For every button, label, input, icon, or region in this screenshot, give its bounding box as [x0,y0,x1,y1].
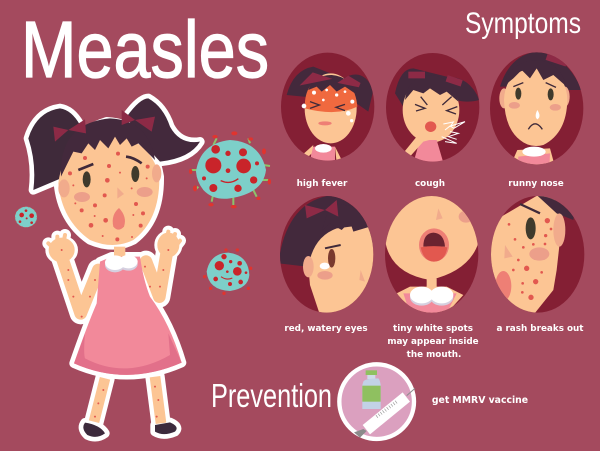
collar [105,258,125,272]
virus: large [189,131,271,208]
label: red, watery eyes: red, watery eyes [284,324,368,334]
eyes [83,171,91,187]
label: get MMRV vaccine: get MMRV vaccine [432,395,528,406]
label: cough: cough [415,179,445,189]
label: tiny white spots: may appear inside [387,337,479,347]
limb spots [61,249,169,418]
virus: small [15,207,37,227]
vaccine icon [339,364,415,439]
eyebrows [78,157,142,170]
vial [362,370,381,409]
fringe [61,118,155,177]
symptom: runny nose [490,52,583,170]
symptom: white spots in mouth [385,195,480,313]
heading: prevention: Prevention [211,377,332,414]
head [58,135,159,245]
symptom: high fever [281,53,374,170]
label: runny nose: runny nose [508,179,564,189]
shoes [83,422,177,437]
mouth [113,208,125,230]
symptom: red, watery eyes [278,195,377,315]
dress [74,257,182,375]
bows [53,110,155,142]
label: tiny white spots [387,324,479,360]
neck [114,247,125,258]
girl illustration [28,98,200,437]
label: a rash breaks out: a rash breaks out [496,324,584,334]
hair ponytails [28,108,80,190]
spots [68,152,150,241]
arms [48,232,180,313]
virus: medium [203,248,252,295]
symptom: rash [490,190,584,315]
label: tiny white spots: tiny white spots [393,324,473,334]
label: tiny white spots: the mouth. [407,350,461,360]
legs [94,377,161,423]
symptom: cough [386,53,479,168]
syringe [354,388,415,438]
label: high fever: high fever [297,179,348,189]
girl white outline [28,98,200,437]
cheeks and nose [74,192,90,202]
ears [58,179,70,197]
title: Measles [21,5,269,94]
